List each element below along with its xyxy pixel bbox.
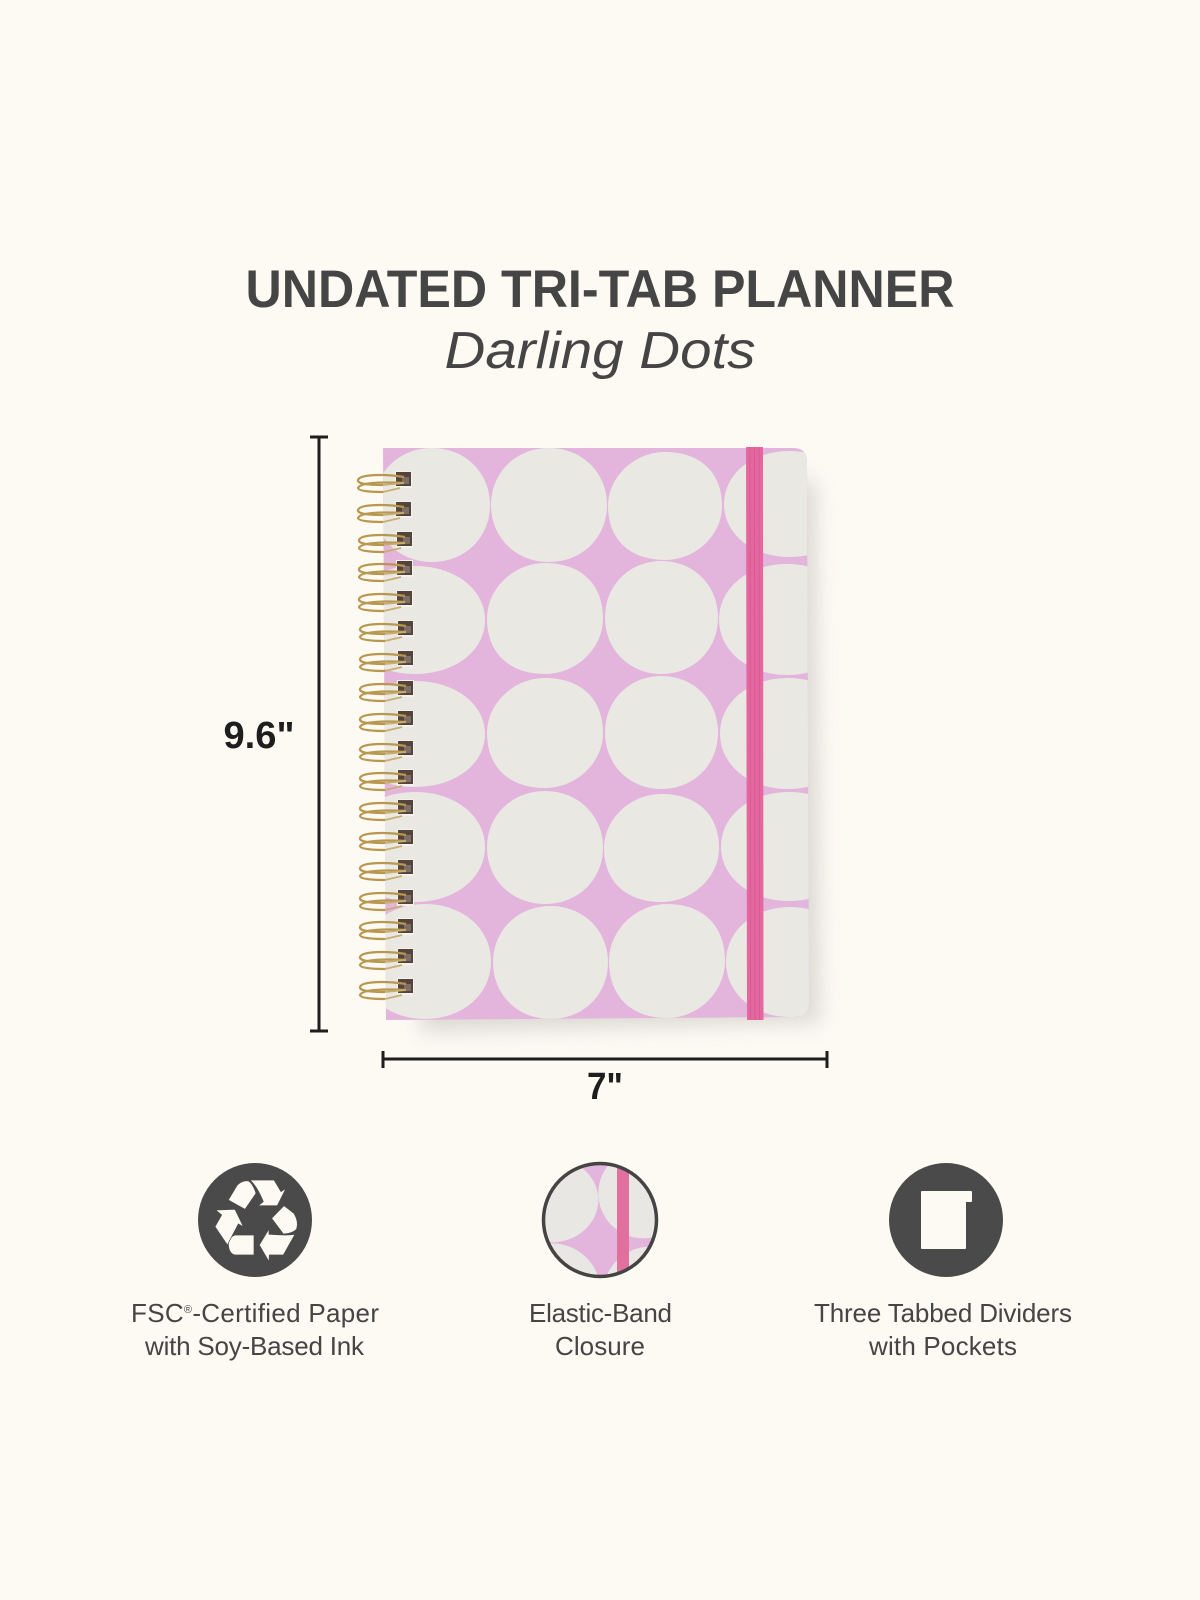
label: Three Tabbed Dividers — [814, 1298, 1072, 1328]
width dimension — [383, 1051, 827, 1108]
title: UNDATED TRI-TAB PLANNER — [246, 260, 954, 319]
icon: recycling symbol — [198, 1163, 312, 1277]
label: -Certified Paper — [192, 1298, 379, 1328]
height dimension: 9.6" — [224, 715, 294, 757]
planner cover with dot pattern — [383, 448, 809, 1020]
feature: FSC paper — [131, 1163, 387, 1361]
cover shadow — [420, 480, 820, 1032]
elastic band — [746, 447, 764, 1020]
planner illustration — [345, 445, 857, 1032]
feature: elastic band closure — [531, 1162, 670, 1356]
height dimension — [224, 437, 328, 1031]
icon: elastic band close-up — [542, 1162, 658, 1278]
label: ® — [184, 1304, 192, 1316]
label: FSC — [131, 1298, 379, 1328]
infographic canvas — [133, 270, 1072, 1360]
label: Elastic-Band — [529, 1298, 672, 1328]
label: Closure — [555, 1331, 645, 1361]
spiral binding — [358, 471, 414, 999]
icon: tabbed divider — [889, 1163, 1003, 1277]
width dimension: 7" — [587, 1066, 623, 1108]
label: with Pockets — [868, 1331, 1017, 1361]
feature: tabbed dividers — [814, 1163, 1079, 1361]
subtitle: Darling Dots — [444, 322, 756, 380]
label: with Soy-Based Ink — [144, 1331, 365, 1361]
